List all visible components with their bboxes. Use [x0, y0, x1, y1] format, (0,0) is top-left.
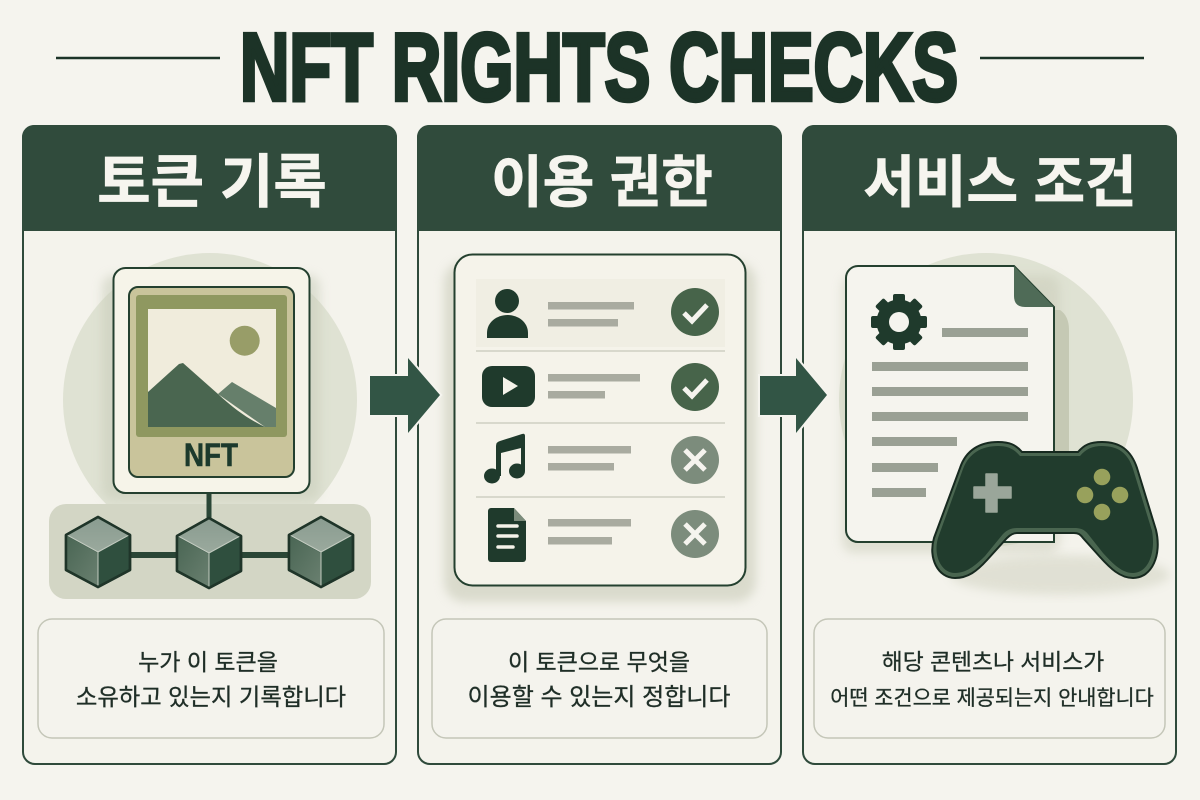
panel header: token record — [22, 125, 397, 231]
description box: 이 토큰으로 무엇을 — [508, 649, 690, 675]
icon: music note — [484, 434, 525, 484]
panel header: usage rights: 이용 권한 — [491, 151, 713, 214]
description box — [432, 619, 767, 738]
illustration: terms document and game controller — [839, 253, 1170, 595]
arrow: token record to usage rights — [370, 358, 440, 433]
icon: document — [488, 508, 526, 562]
description box: 해당 콘텐츠나 서비스가 — [882, 649, 1104, 675]
placeholder text bars — [548, 302, 640, 544]
description box: 이용할 수 있는지 정합니다 — [468, 684, 730, 711]
icon: video play — [482, 366, 535, 407]
description box: 어떤 조건으로 제공되는지 안내합니다 — [830, 687, 1154, 710]
rights checklist card — [444, 254, 756, 602]
panel header: service terms — [802, 125, 1177, 231]
chain platform — [49, 493, 371, 599]
panel: service terms — [802, 125, 1177, 764]
NFT card: NFT — [184, 437, 238, 473]
panel header: service terms: 서비스 조건 — [863, 151, 1137, 214]
panel header: token record: 토큰 기록 — [97, 150, 327, 215]
description box: 누가 이 토큰을 — [138, 649, 278, 675]
description box — [814, 619, 1165, 738]
icon: game controller — [932, 442, 1170, 595]
illustration: NFT card on blockchain — [49, 253, 371, 599]
icon: gear — [871, 294, 927, 350]
description box: 소유하고 있는지 기록합니다 — [76, 684, 346, 710]
panel: usage rights — [417, 125, 782, 764]
description box — [38, 619, 384, 738]
NFT card — [114, 268, 310, 493]
status icons: allowed and denied — [671, 288, 719, 558]
arrow: usage rights to service terms — [760, 358, 827, 433]
terms document — [842, 266, 1069, 553]
icon: person — [487, 289, 528, 338]
panel: token record — [22, 125, 397, 764]
document text bars — [872, 328, 1028, 497]
panel header: usage rights — [417, 125, 782, 231]
